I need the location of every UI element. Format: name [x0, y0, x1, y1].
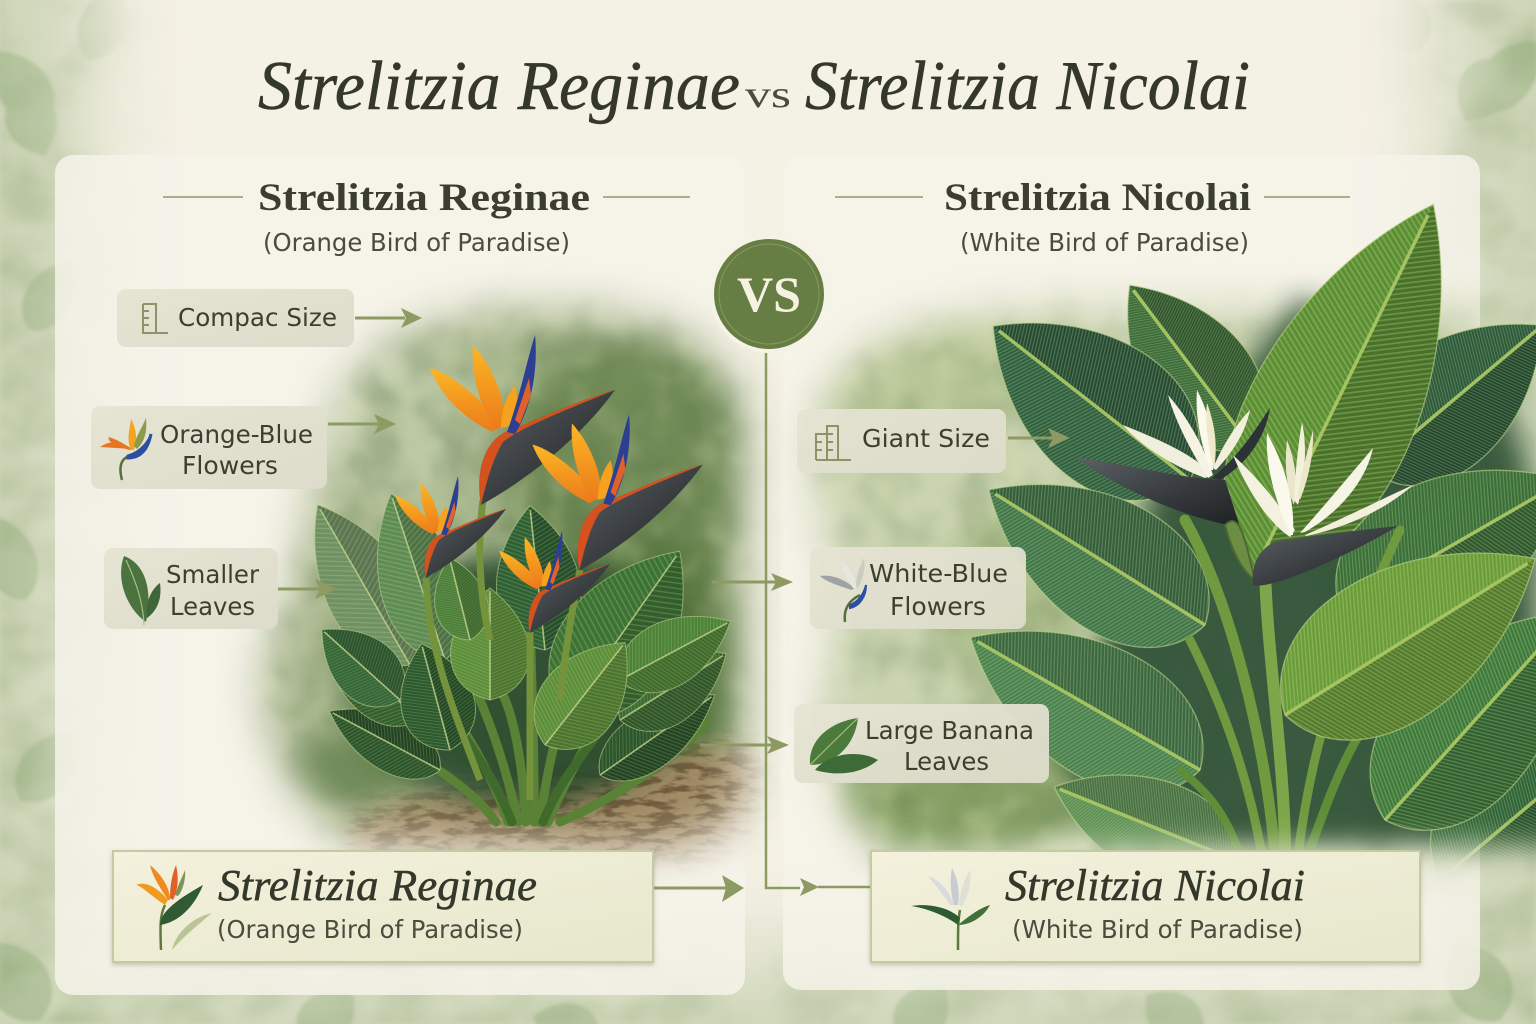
plant: Strelitzia Reginae	[281, 335, 746, 822]
garden backdrop: right	[790, 282, 1480, 884]
icon: building ruler	[816, 426, 851, 460]
name card: Strelitzia Nicolai	[871, 851, 1420, 962]
icon: orange flower sprig	[136, 865, 212, 950]
panel: Strelitzia Reginae	[55, 155, 745, 995]
garden backdrop: left	[234, 280, 776, 877]
icon: banana leaves	[810, 718, 878, 773]
orange flowers	[395, 335, 703, 633]
feature: orange-blue flowers	[91, 406, 327, 489]
feature: orange-blue flowers: Flowers	[182, 451, 278, 480]
feature: smaller leaves: Smaller	[166, 560, 260, 589]
feature: large banana leaves	[794, 704, 1049, 783]
VS badge: VS	[737, 266, 801, 322]
title: Strelitzia Nicolai	[805, 48, 1250, 125]
arrow: to white-blue flowers	[712, 573, 793, 591]
heading: left	[163, 176, 690, 257]
name card: Strelitzia Nicolai: (White Bird of Paradise)	[1012, 915, 1303, 944]
arrow: left card	[654, 875, 744, 902]
name card: Strelitzia Reginae	[113, 851, 653, 962]
feature: white-blue flowers	[810, 547, 1026, 629]
feature: compact size	[117, 289, 354, 347]
feature: giant size	[797, 409, 1006, 473]
front leaf	[1280, 552, 1536, 741]
leaf stems	[350, 600, 705, 822]
title	[258, 48, 1250, 125]
VS badge	[710, 235, 828, 353]
VS connector line	[766, 345, 800, 888]
feature: orange-blue flowers: Orange-Blue	[160, 420, 313, 449]
heading: right: (White Bird of Paradise)	[960, 228, 1249, 257]
stems	[1180, 520, 1400, 855]
title: vs	[745, 74, 791, 116]
name card: Strelitzia Reginae: Strelitzia Reginae	[218, 861, 537, 910]
icon: ruler	[143, 304, 168, 333]
feature: compact size: Compac Size	[178, 303, 337, 332]
feature: white-blue flowers: Flowers	[890, 592, 986, 621]
icon: white flower sprig	[911, 868, 990, 950]
heading: left: Strelitzia Reginae	[258, 176, 590, 219]
leaf cluster	[281, 481, 746, 799]
feature: large banana leaves: Large Banana	[865, 716, 1034, 745]
white flowers	[1075, 390, 1413, 586]
arrow: orange-blue flowers	[328, 414, 396, 434]
icon: leaf	[121, 556, 160, 625]
arrow: compact size	[355, 308, 422, 328]
feature: large banana leaves: Leaves	[904, 747, 989, 776]
flower stalks	[426, 500, 580, 800]
arrow: giant size	[1008, 428, 1070, 448]
name card: Strelitzia Reginae: (Orange Bird of Paradise)	[217, 915, 523, 944]
title: Strelitzia Reginae	[258, 48, 740, 125]
plant: Strelitzia Nicolai	[970, 203, 1536, 868]
plant shadow mass	[355, 555, 695, 805]
arrow: connector to right card	[800, 878, 871, 896]
feature: white-blue flowers: White-Blue	[869, 559, 1008, 588]
panel: Strelitzia Nicolai	[783, 155, 1480, 990]
heading: right	[835, 176, 1350, 257]
arrow: to large banana leaves	[700, 736, 789, 754]
back leaves	[937, 167, 1536, 931]
icon: orange flower	[100, 418, 151, 480]
plant shadow mass	[1060, 300, 1536, 860]
icon: white flower	[820, 558, 866, 622]
arrow: smaller leaves	[278, 579, 337, 599]
heading: left: (Orange Bird of Paradise)	[263, 228, 570, 257]
heading: right: Strelitzia Nicolai	[944, 176, 1251, 219]
name card: Strelitzia Nicolai: Strelitzia Nicolai	[1005, 861, 1305, 910]
feature: smaller leaves: Leaves	[170, 592, 255, 621]
feature: smaller leaves	[104, 548, 278, 629]
feature: giant size: Giant Size	[862, 424, 990, 453]
